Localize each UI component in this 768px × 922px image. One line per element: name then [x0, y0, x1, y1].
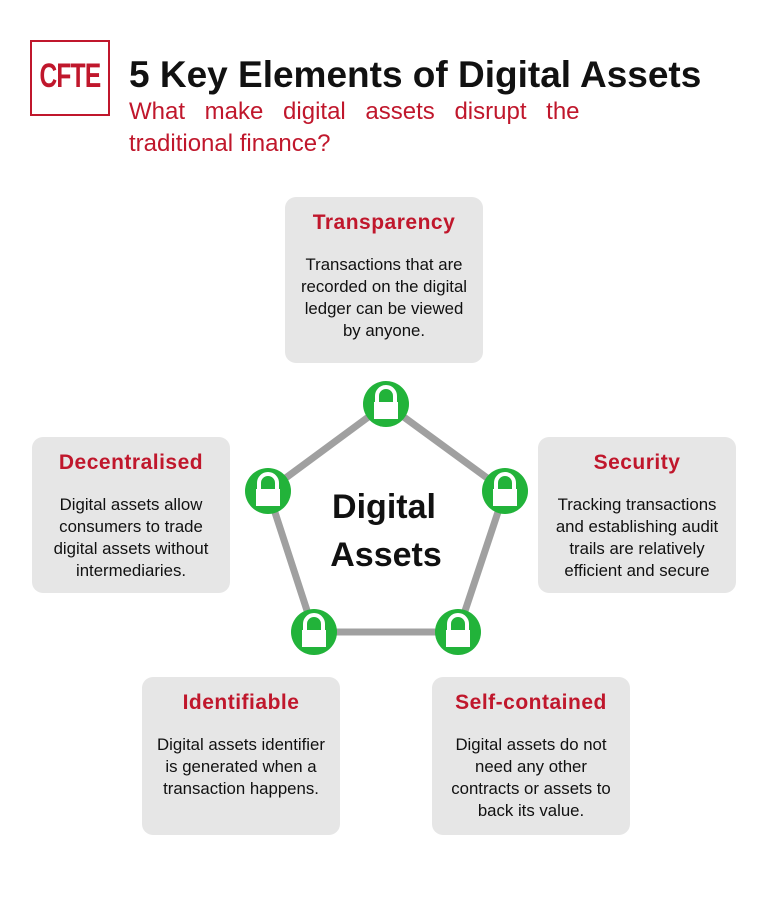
panel: self-contained: [432, 677, 630, 835]
panel: self-contained: back its value.: [478, 801, 584, 820]
panel: decentralised: consumers to trade: [59, 517, 203, 536]
subtitle: What make digital assets disrupt the: [129, 98, 580, 125]
panel: security: Security: [594, 451, 680, 474]
panel: decentralised: [32, 437, 230, 593]
panel: decentralised: digital assets without: [54, 539, 208, 558]
panel: transparency: recorded on the digital: [301, 277, 467, 296]
subtitle: traditional finance?: [129, 130, 330, 157]
center label: Digital: [332, 488, 436, 526]
subtitle: [129, 98, 580, 157]
panel: identifiable: is generated when a: [165, 757, 317, 776]
panel: decentralised: Decentralised: [59, 451, 203, 474]
panel: transparency: Transparency: [313, 211, 455, 234]
logo: [30, 40, 110, 116]
panel: self-contained: need any other: [475, 757, 587, 776]
panel: transparency: by anyone.: [343, 321, 425, 340]
panel: security: [538, 437, 736, 593]
panel: transparency: ledger can be viewed: [305, 299, 463, 318]
pentagon diagram: [245, 381, 528, 655]
center label: [330, 488, 442, 574]
panel: self-contained: contracts or assets to: [451, 779, 611, 798]
panel: identifiable: [142, 677, 340, 835]
lock icons: [245, 381, 528, 655]
panel: identifiable: transaction happens.: [163, 779, 319, 798]
title: 5 Key Elements of Digital Assets: [129, 54, 701, 95]
panel: self-contained: Digital assets do not: [455, 735, 607, 754]
panel: decentralised: intermediaries.: [76, 561, 186, 580]
panel: security: trails are relatively: [569, 539, 705, 558]
panel: self-contained: Self-contained: [455, 691, 607, 714]
panel: decentralised: Digital assets allow: [60, 495, 202, 514]
center label: Assets: [330, 536, 442, 574]
panel: transparency: [285, 197, 483, 363]
panel: security: Tracking transactions: [558, 495, 716, 514]
panel: identifiable: Digital assets identifier: [157, 735, 325, 754]
panel: transparency: Transactions that are: [305, 255, 462, 274]
panel: identifiable: Identifiable: [183, 691, 299, 714]
panel: security: efficient and secure: [564, 561, 710, 580]
logo: CFTE: [39, 57, 101, 95]
panel: security: and establishing audit: [556, 517, 718, 536]
